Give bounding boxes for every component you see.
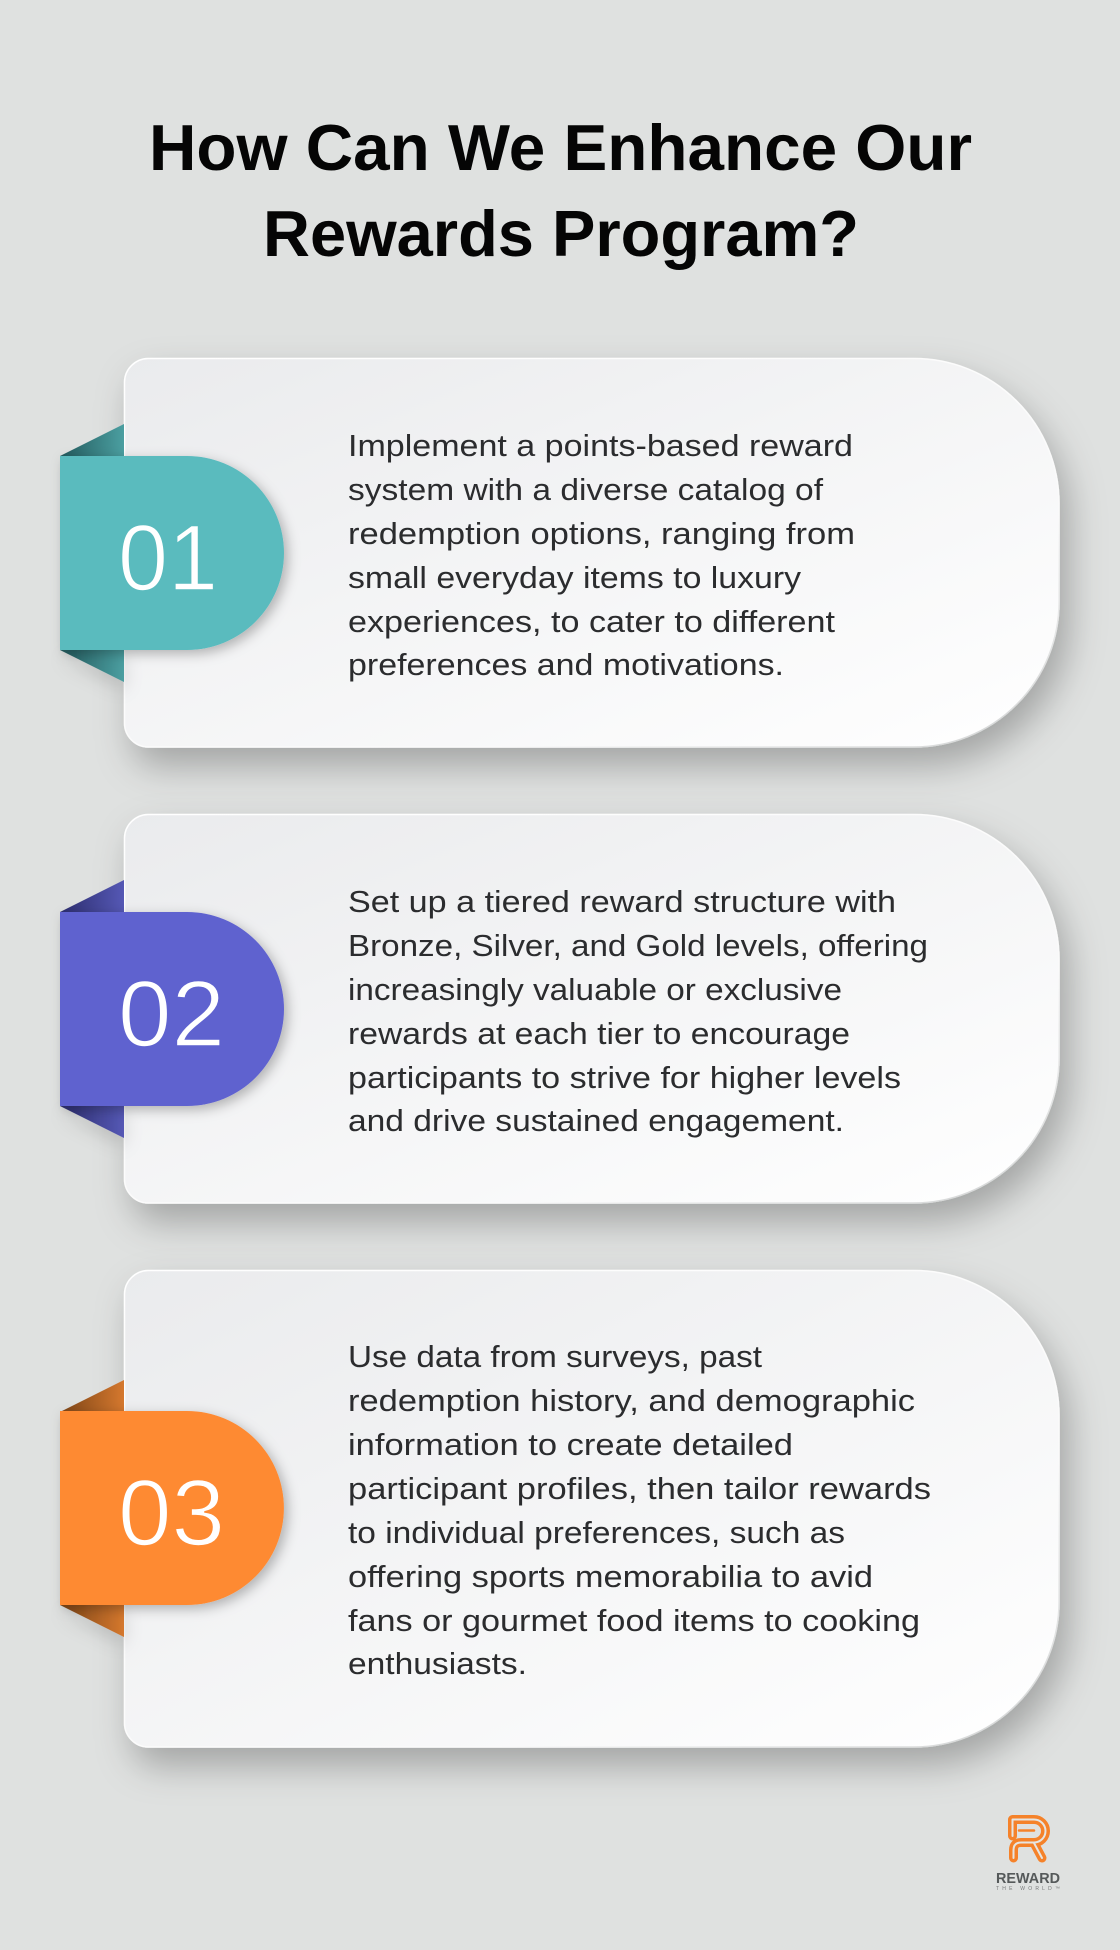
description 02: Bronze, Silver, and Gold levels, offering	[348, 928, 928, 963]
logo wordmark: REWARD	[996, 1870, 1060, 1887]
ribbon fold bottom 03	[60, 1605, 124, 1637]
number badge 02	[60, 912, 284, 1106]
description 02: participants to strive for higher levels	[348, 1060, 901, 1095]
ribbon fold top 02	[60, 880, 124, 912]
number 01: 01	[118, 505, 218, 610]
description 01	[348, 428, 855, 682]
ribbon fold top 01	[60, 424, 124, 456]
panel: step 02	[60, 814, 1059, 1203]
title	[149, 111, 972, 270]
description 02: and drive sustained engagement.	[348, 1103, 844, 1138]
number 02: 02	[118, 961, 225, 1066]
description 03: fans or gourmet food items to cooking	[348, 1603, 920, 1638]
description 01: Implement a points-based reward	[348, 428, 853, 463]
description 01: small everyday items to luxury	[348, 560, 802, 595]
description 01: system with a diverse catalog of	[348, 472, 823, 507]
card 01 background	[124, 358, 1059, 747]
panel: step 01	[60, 358, 1059, 747]
number badge 01	[60, 456, 284, 650]
description 02: Set up a tiered reward structure with	[348, 884, 896, 919]
description 03	[348, 1339, 931, 1681]
icon: R mark	[1012, 1820, 1046, 1858]
card 02 background	[124, 814, 1059, 1203]
ribbon fold bottom 01	[60, 650, 124, 682]
description 03: Use data from surveys, past	[348, 1339, 762, 1374]
description 03: offering sports memorabilia to avid	[348, 1559, 873, 1594]
ribbon fold bottom 02	[60, 1106, 124, 1138]
card 03 background	[124, 1270, 1059, 1747]
description 02: rewards at each tier to encourage	[348, 1016, 850, 1051]
description 03: participant profiles, then tailor rewards	[348, 1471, 931, 1506]
description 03: redemption history, and demographic	[348, 1383, 915, 1418]
title: How Can We Enhance Our	[149, 111, 972, 184]
description 03: enthusiasts.	[348, 1646, 527, 1681]
description 03: to individual preferences, such as	[348, 1515, 845, 1550]
number 03: 03	[118, 1460, 225, 1565]
description 01: experiences, to cater to different	[348, 604, 835, 639]
title: Rewards Program?	[263, 197, 859, 270]
description 01: preferences and motivations.	[348, 647, 784, 682]
description 03: information to create detailed	[348, 1427, 793, 1462]
description 02	[348, 884, 928, 1138]
logo: Reward the World	[996, 1820, 1060, 1892]
logo tagline: THE WORLD™	[996, 1886, 1060, 1892]
panel: step 03	[60, 1270, 1059, 1747]
ribbon fold top 03	[60, 1380, 124, 1412]
number badge 03	[60, 1411, 284, 1605]
description 01: redemption options, ranging from	[348, 516, 855, 551]
description 02: increasingly valuable or exclusive	[348, 972, 842, 1007]
